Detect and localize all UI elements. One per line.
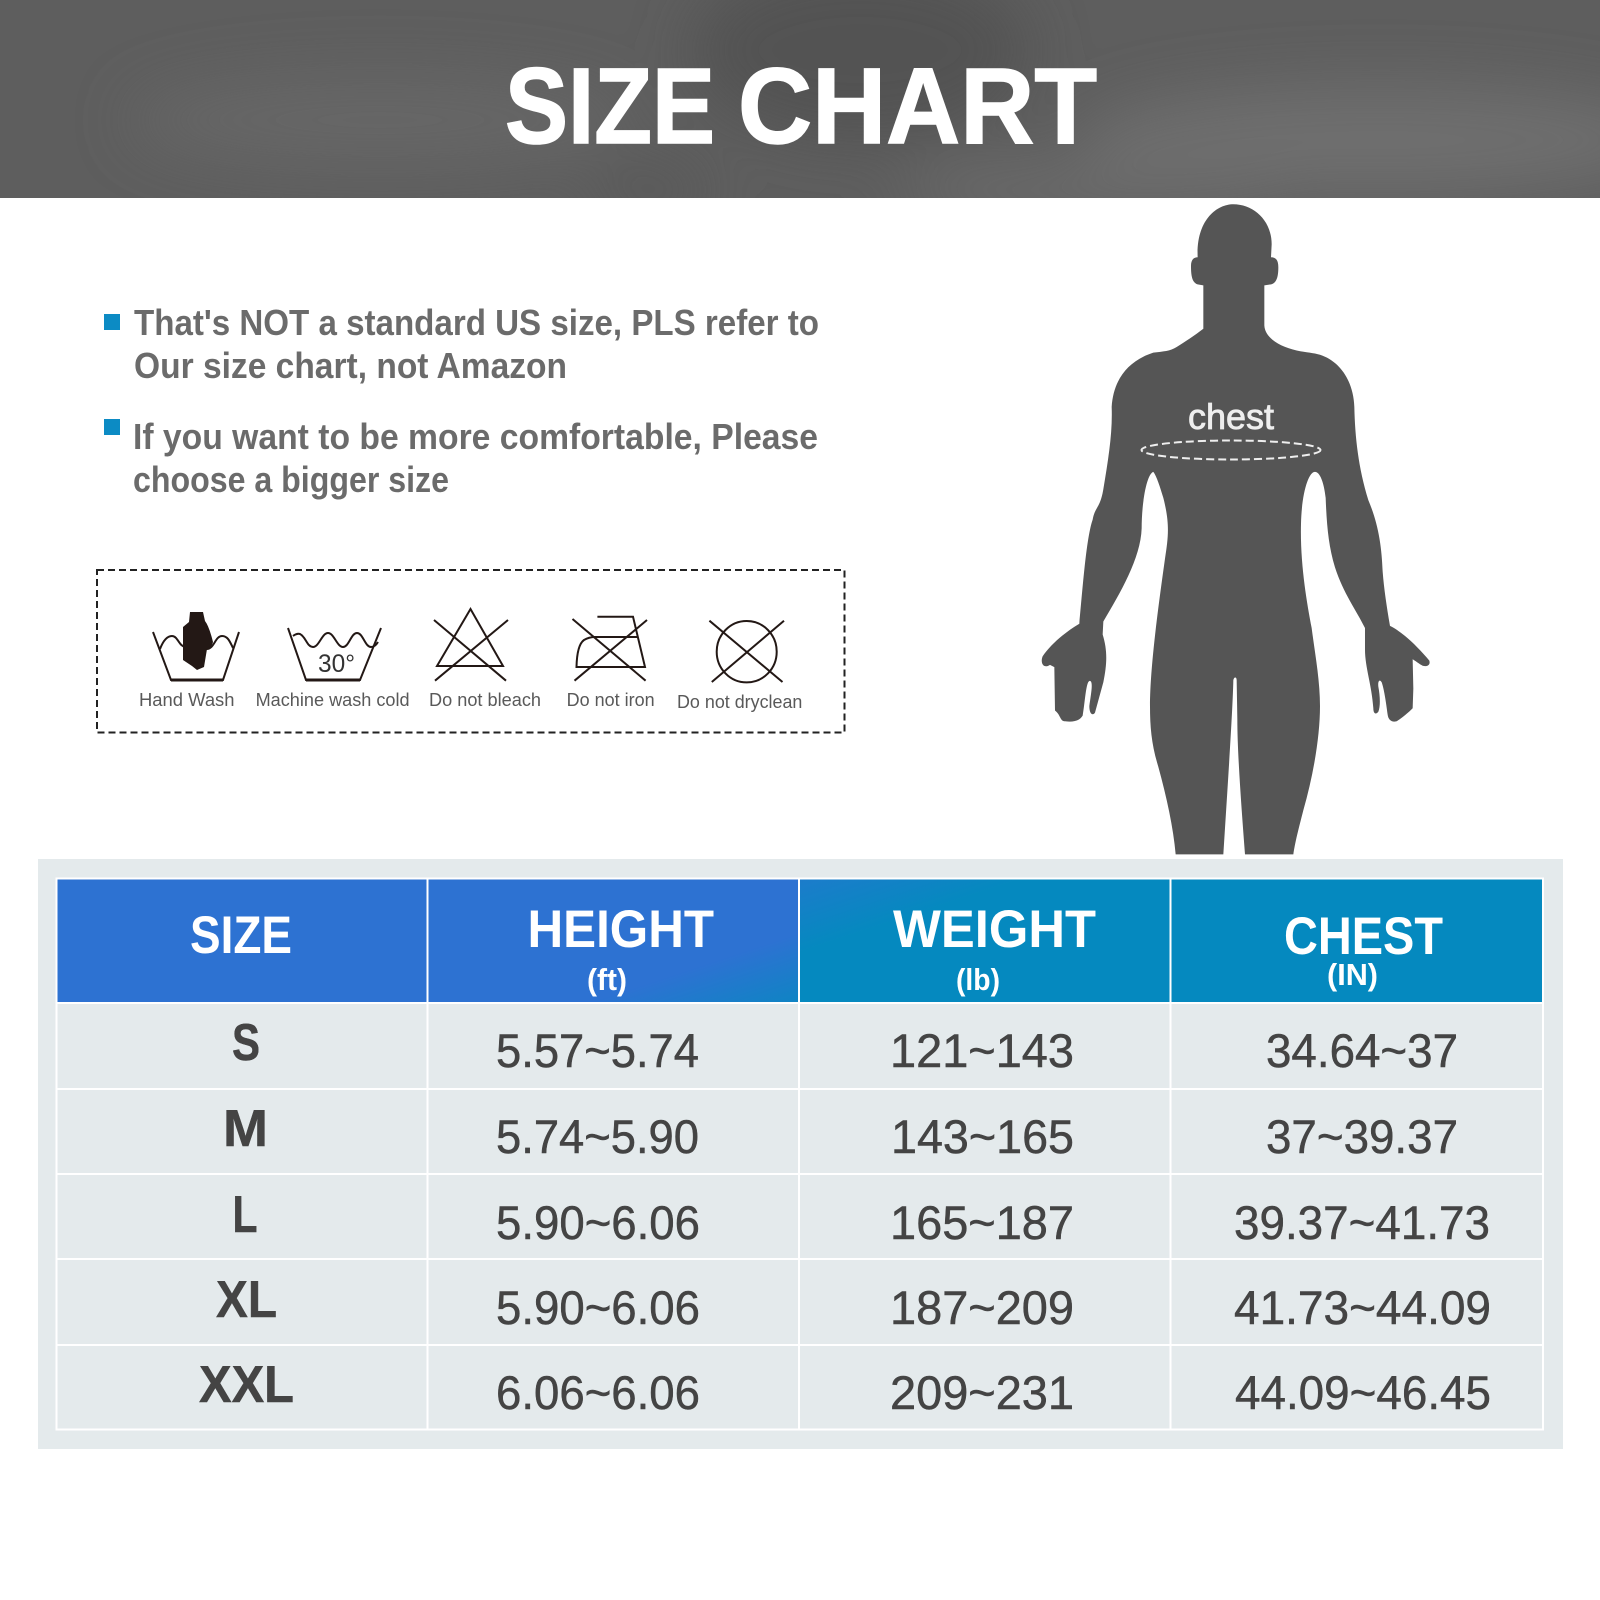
chest measurement ellipse: [1142, 440, 1320, 460]
note line 3: If you want to be more comfortable, Please: [133, 416, 818, 457]
row S: 34.64~37: [1266, 1024, 1458, 1077]
row M: 5.74~5.90: [496, 1110, 699, 1163]
row XL: 187~209: [890, 1281, 1074, 1334]
table grid: [56, 878, 1543, 1430]
header cell: height: [428, 880, 798, 1002]
label: do not iron: Do not iron: [567, 689, 655, 710]
row L: 5.90~6.06: [496, 1196, 700, 1249]
row M: [223, 1100, 1458, 1163]
header banner: [0, 0, 1600, 220]
header cell: height: (ft): [587, 962, 627, 997]
note line 4: choose a bigger size: [133, 459, 449, 500]
row XXL: 6.06~6.06: [496, 1366, 700, 1419]
body silhouette: [1042, 204, 1430, 854]
chest label: chest: [1188, 396, 1274, 437]
header cell: weight: WEIGHT: [893, 900, 1096, 959]
icon: machine wash 30: 30°: [318, 650, 355, 678]
header cell: weight: [800, 880, 1170, 1002]
icon: machine wash 30: [288, 628, 381, 680]
row XL: 5.90~6.06: [496, 1281, 700, 1334]
row XL: [216, 1271, 1491, 1334]
icon: do not dryclean: [709, 621, 784, 682]
header cell: weight: (lb): [956, 962, 1000, 997]
header cell: chest: (IN): [1327, 957, 1378, 992]
bullet square 1: [104, 314, 120, 330]
row S: 121~143: [890, 1024, 1074, 1077]
label: machine wash: Machine wash cold: [256, 689, 410, 710]
title: SIZE: [505, 45, 715, 166]
row XXL: 44.09~46.45: [1235, 1366, 1491, 1419]
row XL: XL: [216, 1271, 277, 1329]
row S: 5.57~5.74: [496, 1024, 699, 1077]
table header row: [58, 880, 1542, 1002]
row XXL: 209~231: [890, 1366, 1074, 1419]
header cell: chest: [1172, 880, 1542, 1002]
row XXL: [199, 1356, 1491, 1419]
row S: [232, 1014, 1458, 1077]
row M: 37~39.37: [1266, 1110, 1458, 1163]
row L: L: [232, 1186, 258, 1244]
row S: S: [232, 1014, 260, 1072]
header cell: size: SIZE: [190, 906, 292, 965]
header cell: height: HEIGHT: [528, 900, 714, 959]
body shape: [1042, 204, 1430, 854]
label: do not dryclean: Do not dryclean: [677, 691, 802, 712]
row XL: 41.73~44.09: [1234, 1281, 1491, 1334]
row M: M: [223, 1100, 268, 1158]
row L: 39.37~41.73: [1234, 1196, 1490, 1249]
icon: do not bleach: [434, 609, 508, 681]
row L: [232, 1186, 1490, 1249]
header cell: size: [58, 880, 426, 1002]
care instructions panel: [97, 570, 844, 732]
row L: 165~187: [890, 1196, 1074, 1249]
icon: hand wash: [153, 612, 239, 680]
note line 1: That's NOT a standard US size, PLS refer to: [134, 302, 819, 343]
note: standard US size: [104, 302, 819, 386]
row XXL: XXL: [199, 1356, 294, 1414]
label: do not bleach: Do not bleach: [429, 689, 541, 710]
row M: 143~165: [891, 1110, 1074, 1163]
title: CHART: [738, 45, 1097, 166]
icon: do not iron: [572, 617, 647, 681]
size table panel: [38, 859, 1563, 1449]
note: comfort: [104, 416, 818, 500]
bullet square 2: [104, 419, 120, 435]
header cell: chest: CHEST: [1284, 907, 1443, 966]
label: hand wash: Hand Wash: [139, 689, 234, 710]
note line 2: Our size chart, not Amazon: [134, 345, 567, 386]
title: [505, 45, 1097, 166]
